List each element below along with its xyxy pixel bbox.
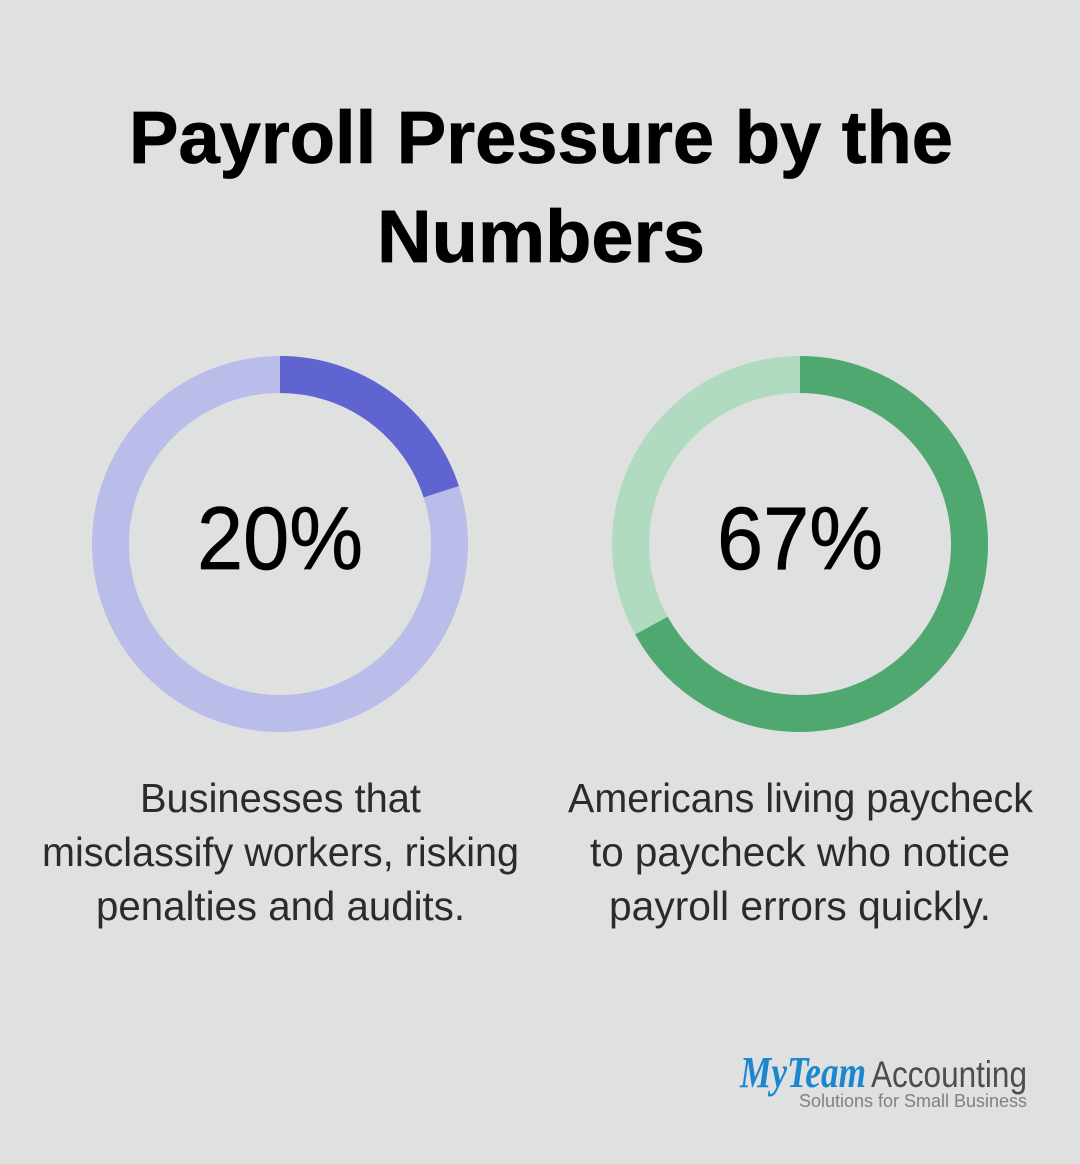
description: misclassified workers: misclassify workers, risking <box>42 829 519 875</box>
logo: MyTeam Accounting: Accounting <box>871 1054 1027 1095</box>
description: misclassified workers: Businesses that <box>140 775 422 821</box>
title: Numbers <box>377 195 705 278</box>
description: paycheck to paycheck <box>568 775 1033 929</box>
panel: 67% statistic <box>568 374 1033 929</box>
logo: MyTeam Accounting: Solutions for Small Business <box>799 1091 1027 1111</box>
description: misclassified workers <box>42 775 519 929</box>
description: misclassified workers: penalties and audits. <box>96 883 465 929</box>
panel: 20% statistic <box>42 374 519 929</box>
donut chart: 20% <box>110 374 450 714</box>
title <box>129 96 953 278</box>
value: 67%: 67% <box>717 488 883 588</box>
description: paycheck to paycheck: to paycheck who notice <box>590 829 1010 875</box>
logo: MyTeam Accounting <box>739 1048 1027 1111</box>
description: paycheck to paycheck: Americans living paycheck <box>568 775 1033 821</box>
donut chart: 67% <box>630 374 970 714</box>
description: paycheck to paycheck: payroll errors quickly. <box>609 883 991 929</box>
value: 20%: 20% <box>197 488 363 588</box>
logo: MyTeam Accounting: MyTeam <box>739 1048 866 1097</box>
title: Payroll Pressure by the <box>129 96 953 179</box>
